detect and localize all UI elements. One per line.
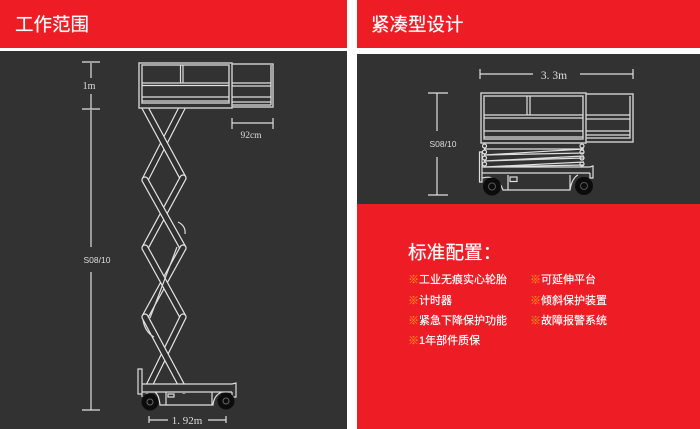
- panel: working range drawing background: [0, 51, 347, 429]
- feature: warranty: ※1年部件质保: [408, 335, 480, 347]
- chassis with wheels: [480, 152, 593, 196]
- heading: working range: 工作范围: [15, 14, 89, 35]
- platform guardrail: [481, 93, 586, 143]
- platform extension: [232, 64, 273, 107]
- platform guardrail: [139, 63, 232, 108]
- chassis with wheels: [138, 369, 236, 410]
- stowed scissor stack: [482, 144, 584, 167]
- scissor arms: [143, 104, 185, 390]
- drawing: stowed lift side view: [480, 93, 633, 196]
- dimension: 1.92m wheelbase: [149, 415, 226, 427]
- panel: standard configuration: [357, 204, 700, 429]
- drawing: extended lift side view: [138, 63, 273, 410]
- dimension: 1m guardrail height: [82, 62, 100, 109]
- feature: extendable platform: ※可延伸平台: [530, 274, 596, 286]
- heading: standard configuration: 标准配置：: [408, 242, 501, 263]
- dimension: 1m guardrail height: 1m: [83, 81, 96, 92]
- dimension: S08/10 working height: S08/10: [84, 255, 111, 265]
- feature: fault alarm: ※故障报警系统: [530, 315, 607, 327]
- feature: emergency lowering: ※紧急下降保护功能: [408, 315, 507, 327]
- dimension: S08/10 stowed height: [428, 93, 457, 195]
- heading: compact design: 紧凑型设计: [371, 14, 464, 35]
- dimension: 3.3m length: 3. 3m: [541, 70, 567, 82]
- dimension: S08/10 stowed height: S08/10: [430, 139, 457, 149]
- dimension: 3.3m length: [480, 69, 633, 82]
- panel: working range header: [0, 0, 347, 48]
- panel: compact design drawing background: [357, 54, 700, 204]
- dimension: S08/10 working height: [82, 110, 111, 410]
- dimension: 92cm extension: [232, 118, 273, 141]
- platform extension: [586, 94, 633, 142]
- feature: tilt protection: ※倾斜保护装置: [530, 295, 607, 307]
- panel: compact design header: [357, 0, 700, 48]
- dimension: 92cm extension: 92cm: [240, 131, 262, 141]
- feature: solid tyres: ※工业无痕实心轮胎: [408, 274, 507, 286]
- feature: hour meter: ※计时器: [408, 295, 452, 307]
- dimension: 1.92m wheelbase: 1. 92m: [172, 415, 203, 427]
